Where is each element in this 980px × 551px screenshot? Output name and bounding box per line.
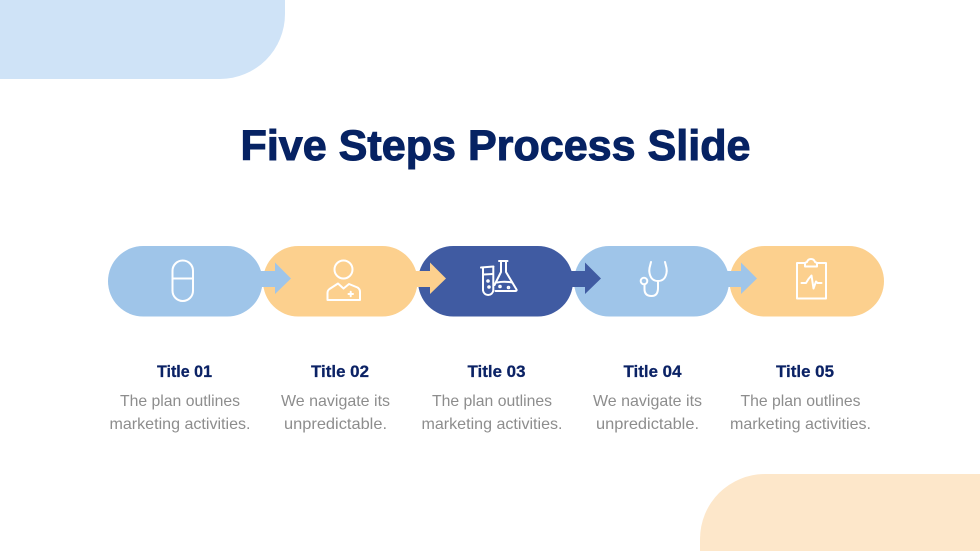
step 3 description line 1: The plan outlines <box>432 393 552 410</box>
step 5 description line 1: The plan outlines <box>740 393 860 410</box>
step 2 text <box>281 362 390 433</box>
step 2 description line 1: We navigate its <box>281 393 390 410</box>
arrow: step 4 to 5 <box>727 262 757 294</box>
title: Five Steps Process Slide <box>240 123 750 170</box>
step 2 description line 2: unpredictable. <box>284 416 387 433</box>
arrow: step 3 to 4 <box>571 262 601 294</box>
icon: medical clipboard <box>797 259 826 298</box>
step 2 pill <box>263 246 418 316</box>
arrow: step 1 to 2 <box>261 262 291 294</box>
step 1 description line 1: The plan outlines <box>120 393 240 410</box>
step 4 description line 1: We navigate its <box>593 393 702 410</box>
step 4 description line 2: unpredictable. <box>596 416 699 433</box>
icon: doctor <box>328 260 360 300</box>
step 5 pill <box>730 246 884 316</box>
step 4 text <box>593 362 702 433</box>
decorative shape: bottom-right peach corner <box>700 474 980 551</box>
step 1 title: Title 01 <box>157 362 212 381</box>
icon: stethoscope <box>641 262 667 296</box>
step 3 title: Title 03 <box>468 362 526 381</box>
step 1 text <box>110 362 250 433</box>
step 4 pill <box>574 246 729 316</box>
icon: lab flasks <box>481 261 517 295</box>
step 5 title: Title 05 <box>776 362 834 381</box>
step 5 text <box>730 362 871 433</box>
step 1 description line 2: marketing activities. <box>110 416 250 433</box>
step 5 description line 2: marketing activities. <box>730 416 871 433</box>
decorative shape: top-left blue corner <box>0 0 285 79</box>
step 4 title: Title 04 <box>624 362 682 381</box>
step 3 description line 2: marketing activities. <box>422 416 562 433</box>
step 1 pill <box>108 246 262 316</box>
step 3 pill <box>418 246 573 316</box>
icon: pill capsule <box>172 260 193 301</box>
arrow: step 2 to 3 <box>416 262 446 294</box>
step 2 title: Title 02 <box>311 362 369 381</box>
step 3 text <box>422 362 562 433</box>
